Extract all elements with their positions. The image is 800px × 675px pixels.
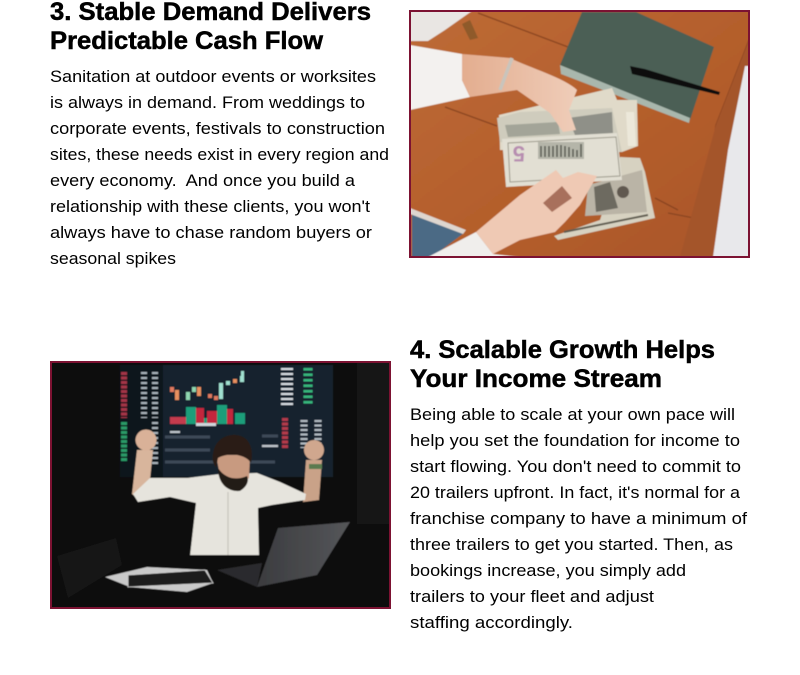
text block: section 3 body: Sanitation at outdoor events or worksites xyxy=(50,68,376,86)
candlesticks xyxy=(170,371,244,400)
photo: hands counting dollar bills on an orange sofa: 5 xyxy=(513,141,525,166)
chair xyxy=(57,538,122,598)
text block: section 3 body: seasonal spikes xyxy=(50,250,176,268)
text block: section 3 body xyxy=(50,68,389,268)
text block: section 3 body: is always in demand. From weddings to xyxy=(50,94,365,112)
lower sleeve xyxy=(428,232,520,257)
text block: section 3 body: relationship with these clients, you won't xyxy=(50,198,370,216)
notebook xyxy=(560,12,714,120)
trading screen xyxy=(162,364,334,478)
lower hand xyxy=(476,170,597,254)
text block: section 4 body: bookings increase, you simply add xyxy=(410,562,686,580)
upper arm and hand xyxy=(462,54,577,132)
text block: section 4 body: start flowing. You don't need to commit to xyxy=(410,458,741,476)
photo: hands counting dollar bills on an orange sofa xyxy=(410,11,749,257)
heading: section 3: Predictable Cash Flow xyxy=(50,27,324,55)
text block: section 3 body: corporate events, festivals to construction xyxy=(50,120,385,138)
photo: man celebrating in front of trading chart screen xyxy=(51,362,390,608)
text block: section 4 body: trailers to your fleet and adjust xyxy=(410,588,654,606)
text block: section 3 body: sites, these needs exist in every region and xyxy=(50,146,389,164)
white object right xyxy=(713,66,749,257)
back bills xyxy=(499,88,638,152)
volume bars xyxy=(170,405,245,424)
text block: section 4 body xyxy=(410,406,747,632)
arms and fists xyxy=(132,450,153,500)
text block: section 3 body: every economy. And once you build a xyxy=(50,172,356,190)
head xyxy=(216,454,250,480)
text block: section 4 body: 20 trailers upfront. In fact, it's normal for a xyxy=(410,484,741,502)
papers xyxy=(105,567,213,592)
upper sleeve xyxy=(410,11,472,41)
text block: section 4 body: help you set the foundation for income to xyxy=(410,432,740,450)
text block: section 4 body: three trailers to get you started. Then, as xyxy=(410,536,733,554)
heading: section 4 xyxy=(410,336,715,393)
heading: section 3 xyxy=(50,0,371,55)
table xyxy=(109,554,330,592)
text block: section 4 body: staffing accordingly. xyxy=(410,614,573,632)
jeans xyxy=(412,214,464,257)
heading: section 4: 4. Scalable Growth Helps xyxy=(410,336,715,364)
text block: section 4 body: franchise company to have a minimum of xyxy=(410,510,747,528)
laptop xyxy=(257,522,350,587)
front five dollar bill xyxy=(502,133,622,187)
heading: section 4: Your Income Stream xyxy=(410,365,662,393)
text block: section 4 body: Being able to scale at your own pace will xyxy=(410,406,735,424)
shirt xyxy=(133,473,306,556)
bottom bills xyxy=(554,157,655,240)
text block: section 3 body: always have to chase random buyers or xyxy=(50,224,373,242)
